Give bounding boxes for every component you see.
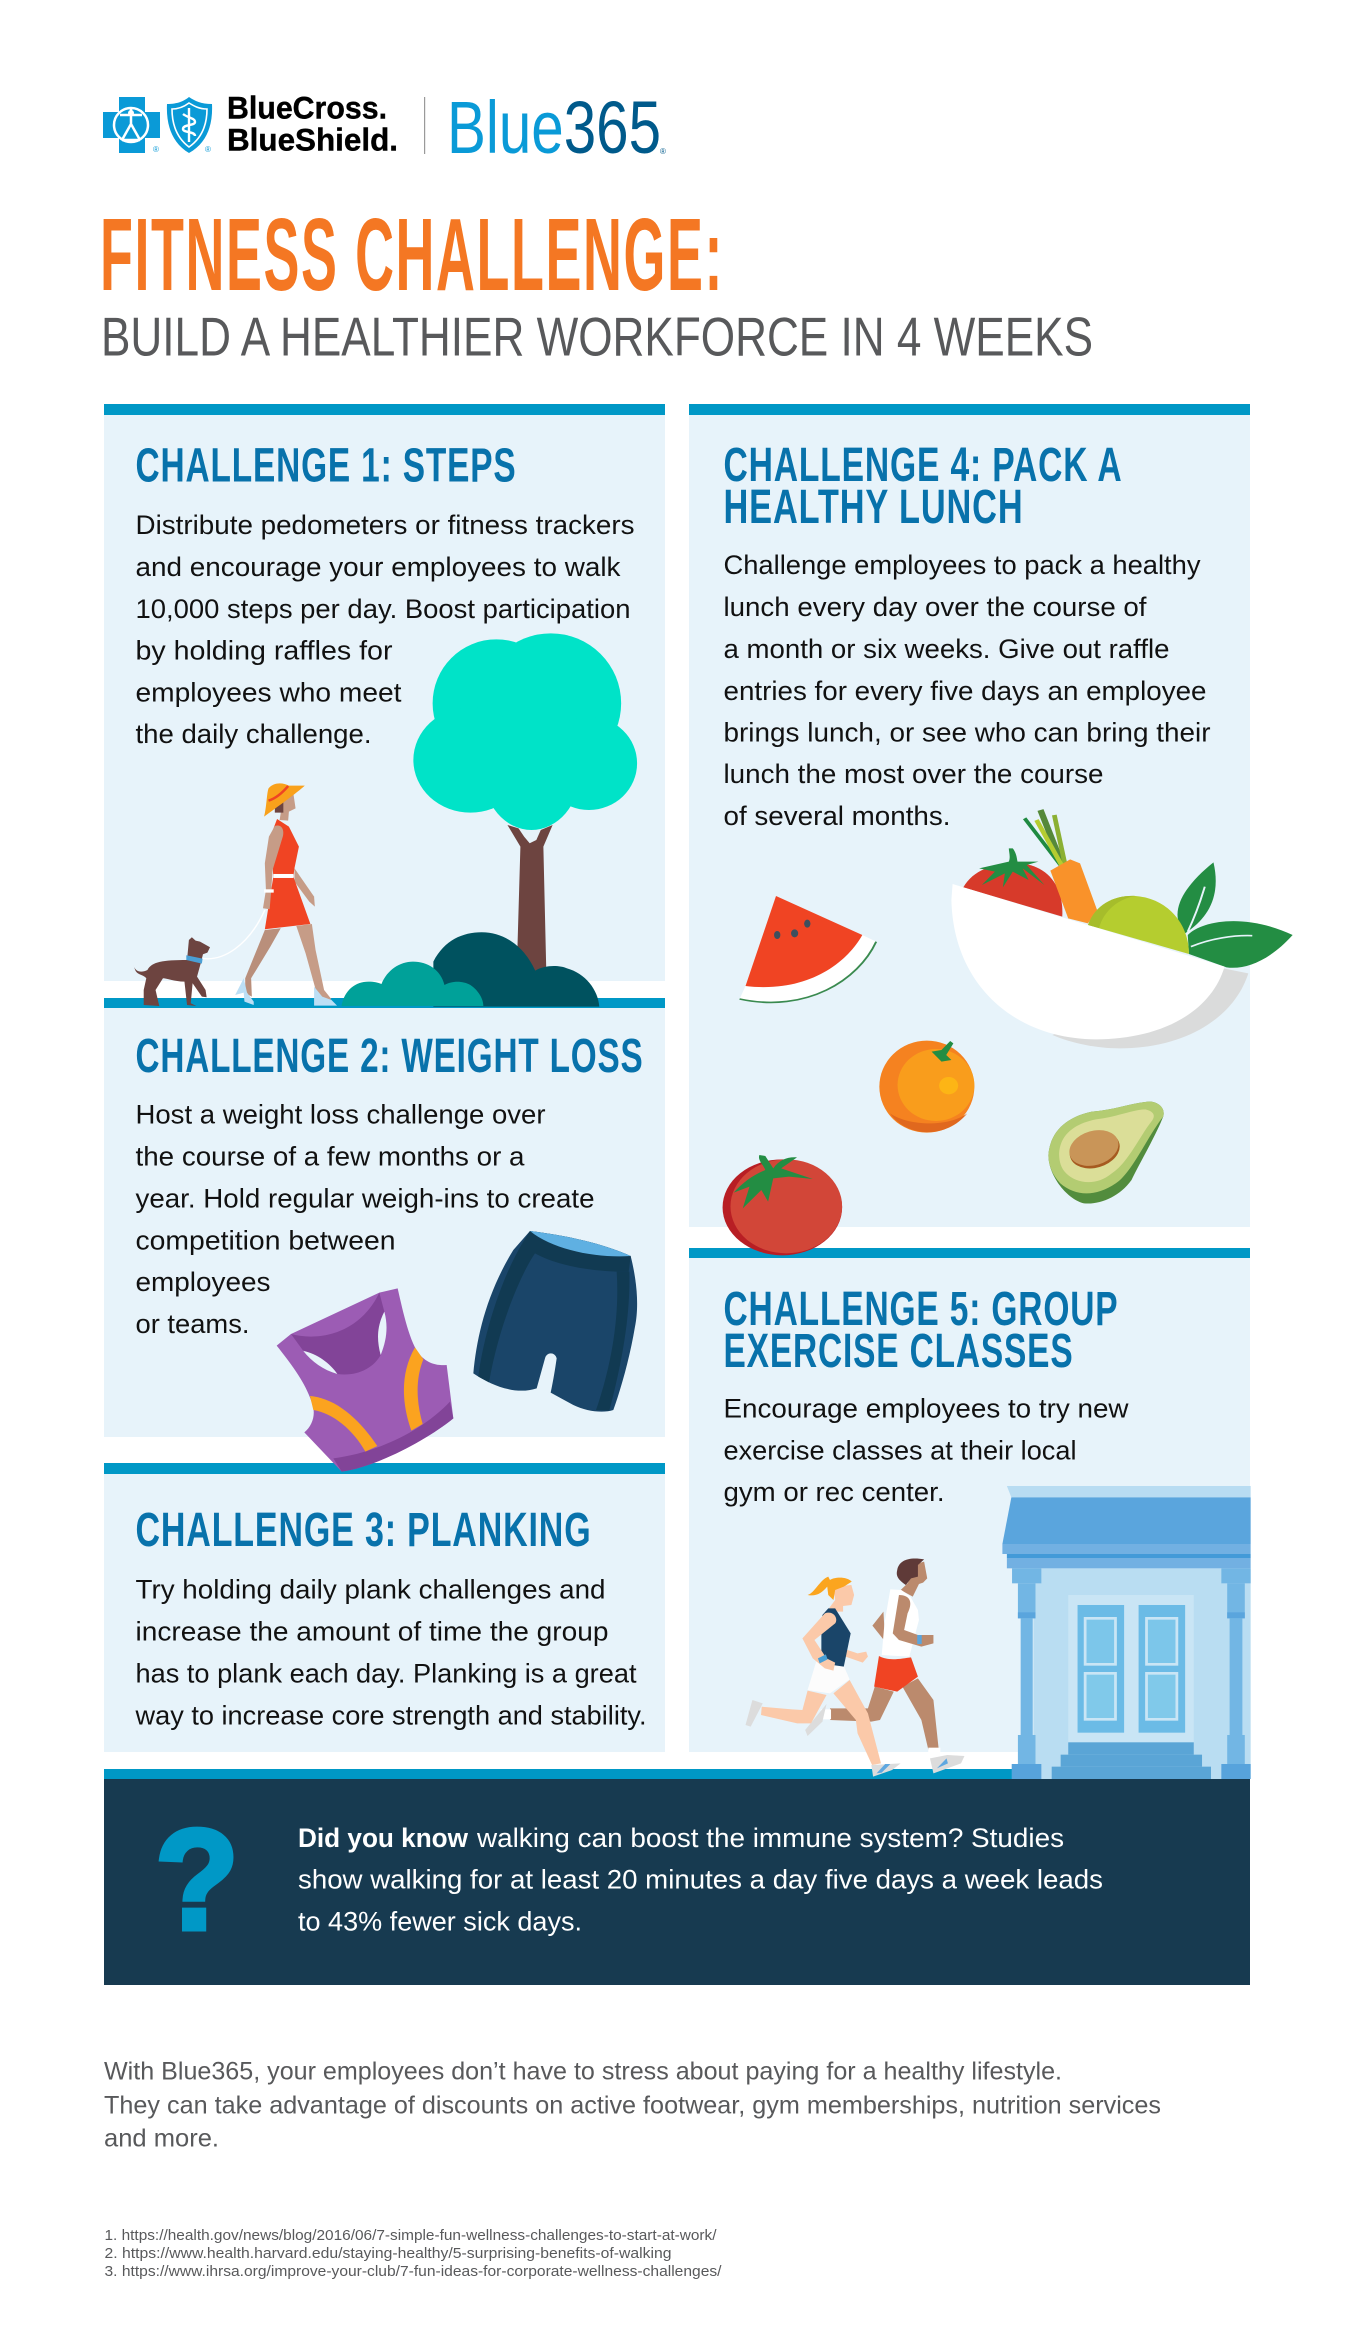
- heading: challenge 2: CHALLENGE 2: WEIGHT LOSS: [136, 1030, 644, 1083]
- text: challenge 5 body: gym or rec center.: [724, 1477, 944, 1507]
- icon: female runner: [746, 1577, 901, 1777]
- text: footnotes: 2. https://www.health.harvard.edu/staying-healthy/5-surprising-benefits-of-walking: [104, 2246, 672, 2262]
- text: did you know fact: walking can boost the immune system? Studies: [476, 1823, 1064, 1853]
- text: did you know fact: Did you know: [298, 1823, 469, 1853]
- text: challenge 4 body: lunch the most over the course: [724, 759, 1104, 789]
- text: challenge 3 body: has to plank each day. Planking is a great: [136, 1658, 637, 1688]
- callout: did you know: [104, 1769, 1250, 1985]
- illustration: runners and gym building: [746, 1486, 1251, 1779]
- text: challenge 4 body: brings lunch, or see who can bring their: [724, 718, 1211, 748]
- text: challenge 1 body: 10,000 steps per day. Boost participation: [136, 594, 630, 624]
- text: footnotes: [104, 2228, 723, 2280]
- icon: tomato: [723, 1155, 842, 1255]
- text: challenge 4 body: lunch every day over the course of: [724, 592, 1147, 622]
- text: challenge 4 body: entries for every five days an employee: [724, 676, 1206, 706]
- text: challenge 1 body: by holding raffles for: [136, 636, 392, 666]
- heading: challenge 5: CHALLENGE 5: GROUP: [724, 1283, 1118, 1336]
- text: challenge 2 body: or teams.: [136, 1309, 250, 1339]
- heading: challenge 5: EXERCISE CLASSES: [724, 1325, 1074, 1378]
- logo text: BlueShield: BlueShield.: [227, 122, 398, 158]
- icon: dog: [133, 937, 210, 1006]
- registered marks: ®: [205, 145, 211, 154]
- logo: BlueCross BlueShield Blue365: [103, 86, 666, 169]
- icon: tree: [413, 633, 637, 973]
- registered marks: ®: [153, 145, 159, 154]
- heading: challenge 3: CHALLENGE 3: PLANKING: [136, 1504, 592, 1557]
- text: footnotes: 1. https://health.gov/news/blog/2016/06/7-simple-fun-wellness-challenges-to-start-at-work/: [104, 2228, 718, 2244]
- text: did you know fact: show walking for at least 20 minutes a day five days a week leads: [298, 1864, 1103, 1894]
- text: challenge 1 body: and encourage your employees to walk: [136, 552, 621, 582]
- text: challenge 2 body: [136, 1100, 594, 1339]
- text: challenge 3 body: Try holding daily plank challenges and: [136, 1574, 606, 1604]
- text: challenge 5 body: Encourage employees to try new: [724, 1394, 1129, 1424]
- text: challenge 1 body: the daily challenge.: [136, 719, 372, 749]
- text: challenge 3 body: [134, 1574, 646, 1730]
- illustration: healthy food: [723, 810, 1293, 1255]
- text: challenge 2 body: year. Hold regular weigh-ins to create: [136, 1184, 594, 1214]
- illustration: sports bra and shorts: [277, 1231, 637, 1472]
- text: challenge 5 body: [724, 1394, 1129, 1507]
- heading: challenge 4: CHALLENGE 4: PACK A: [724, 439, 1122, 492]
- illustration: woman walking dog with tree: [133, 633, 637, 1007]
- text: challenge 2 body: Host a weight loss challenge over: [136, 1100, 546, 1130]
- text: challenge 2 body: employees: [136, 1267, 270, 1297]
- text: challenge 5 body: exercise classes at their local: [724, 1436, 1076, 1466]
- heading: challenge 4: HEALTHY LUNCH: [724, 481, 1024, 534]
- panel: challenge 5 group exercise: [689, 1248, 1250, 1752]
- text: challenge 4 body: Challenge employees to pack a healthy: [724, 550, 1201, 580]
- icon: woman walking: [202, 783, 337, 1006]
- text: challenge 2 body: the course of a few months or a: [136, 1142, 526, 1172]
- icon: bushes: [342, 932, 599, 1007]
- text: challenge 1 body: [136, 510, 634, 749]
- panel: challenge 2 weight loss: [104, 998, 665, 1437]
- heading: challenge 4: [724, 439, 1122, 534]
- panel: challenge 1 steps: [104, 404, 665, 981]
- text: challenge 4 body: of several months.: [724, 801, 950, 831]
- text: closing paragraph: With Blue365, your employees don’t have to stress about paying for a healthy lifestyle.: [104, 2058, 1062, 2086]
- registered marks: [153, 145, 666, 156]
- logo text: Blue365: Blue365: [447, 86, 661, 169]
- text: did you know fact: to 43% fewer sick days.: [298, 1906, 582, 1936]
- registered marks: ®: [660, 147, 666, 156]
- text: challenge 1 body: Distribute pedometers or fitness trackers: [136, 510, 634, 540]
- icon: blue cross: [103, 97, 160, 153]
- icon: male runner: [805, 1558, 964, 1773]
- title: FITNESS CHALLENGE:: [100, 197, 724, 312]
- logo text: BlueCross: BlueCross.: [227, 90, 387, 126]
- text: challenge 3 body: increase the amount of time the group: [136, 1616, 608, 1646]
- text: challenge 4 body: a month or six weeks. Give out raffle: [724, 634, 1170, 664]
- icon: gym building: [1002, 1486, 1251, 1779]
- icon: watermelon slice: [740, 896, 876, 1002]
- text: challenge 1 body: employees who meet: [136, 678, 402, 708]
- subtitle: BUILD A HEALTHIER WORKFORCE IN 4 WEEKS: [101, 306, 1093, 368]
- heading: challenge 5: [724, 1283, 1118, 1378]
- text: challenge 2 body: competition between: [136, 1226, 396, 1256]
- icon: blue shield: [167, 97, 212, 153]
- text: challenge 3 body: way to increase core strength and stability.: [134, 1700, 646, 1730]
- icon: avocado: [1048, 1102, 1164, 1204]
- heading: challenge 1: CHALLENGE 1: STEPS: [136, 440, 516, 492]
- text: footnotes: 3. https://www.ihrsa.org/improve-your-club/7-fun-ideas-for-corporate-wellness-challenges/: [104, 2264, 723, 2280]
- icon: question mark: ?: [155, 1801, 239, 1960]
- text: closing paragraph: and more.: [104, 2124, 219, 2152]
- text: challenge 4 body: [724, 550, 1211, 831]
- icon: bowl of vegetables: [951, 810, 1293, 1048]
- text: did you know fact: [298, 1823, 1103, 1936]
- icon: sports bra: [277, 1288, 453, 1472]
- icon: shorts: [473, 1231, 637, 1412]
- text: closing paragraph: [104, 2058, 1161, 2152]
- icon: orange: [879, 1041, 974, 1133]
- panel: challenge 3 planking: [104, 1463, 665, 1752]
- panel: challenge 4 healthy lunch: [689, 404, 1250, 1227]
- text: closing paragraph: They can take advantage of discounts on active footwear, gym memberships, nutrition services: [104, 2092, 1161, 2120]
